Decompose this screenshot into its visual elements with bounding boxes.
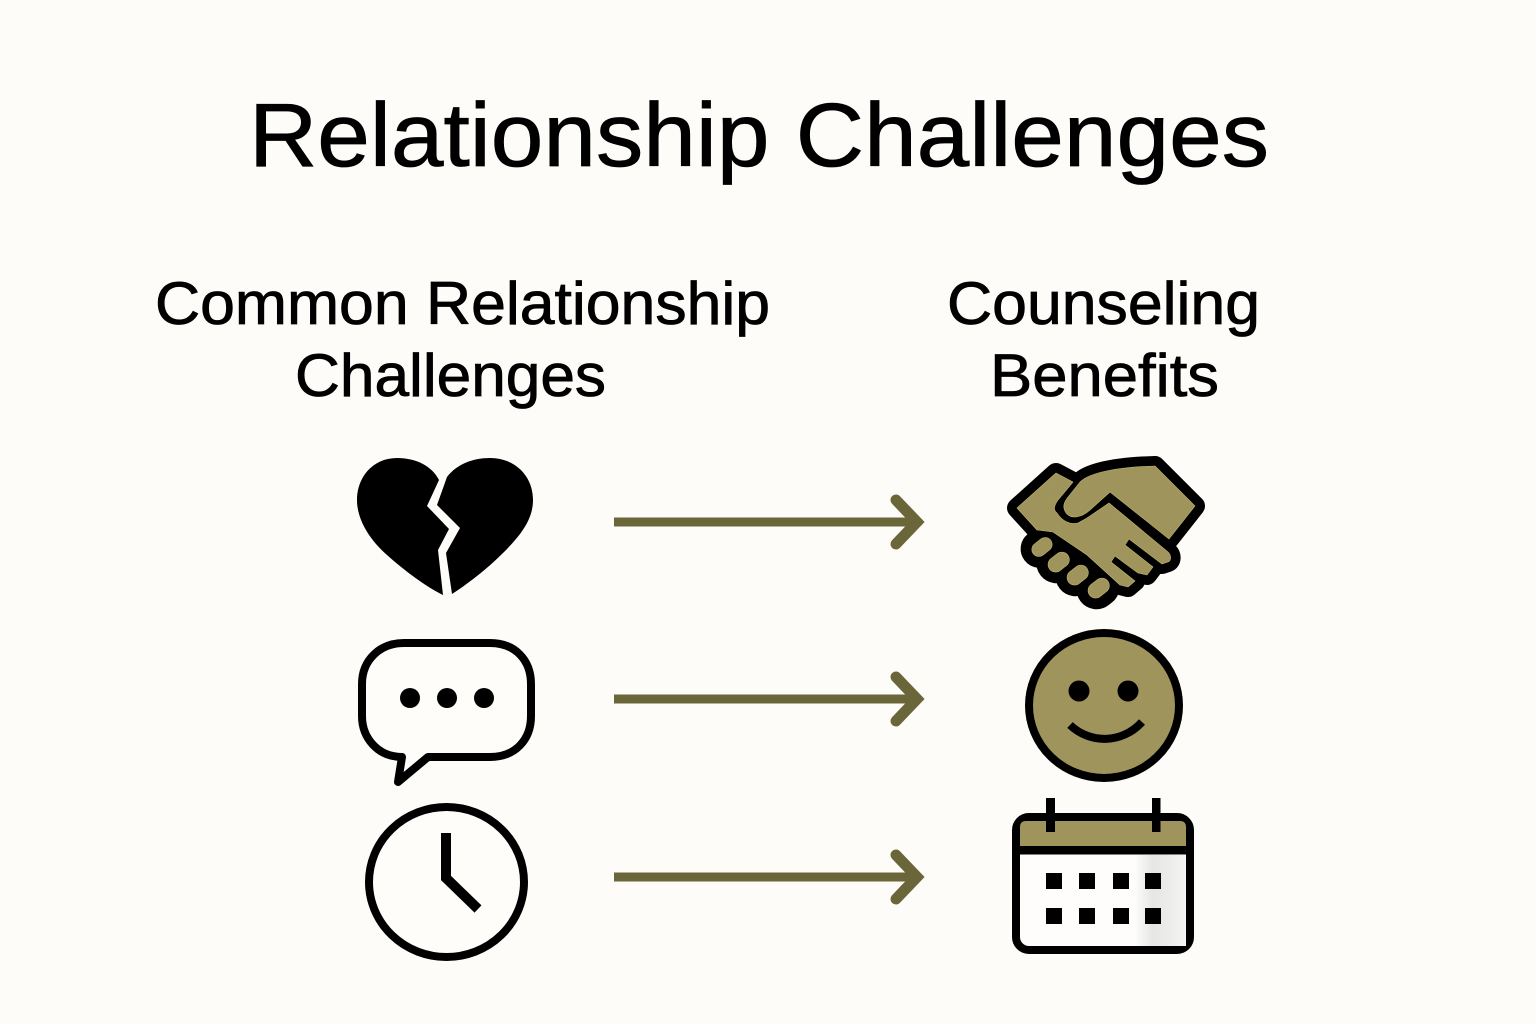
heading: common relationship challenges bbox=[155, 270, 770, 409]
arrow: heart to handshake bbox=[614, 500, 917, 544]
heading: common relationship challenges: Challenges bbox=[295, 342, 606, 409]
icon: handshake bbox=[1017, 466, 1195, 603]
heading: counseling benefits bbox=[947, 270, 1260, 409]
arrow: speech bubble to smiley bbox=[614, 677, 917, 721]
icon: speech bubble bbox=[362, 643, 531, 782]
icon: smiley face bbox=[1029, 633, 1179, 778]
title: Relationship Challenges bbox=[249, 86, 1269, 186]
heading: counseling benefits: Counseling bbox=[947, 270, 1260, 337]
icon: clock bbox=[369, 807, 524, 957]
heading: common relationship challenges: Common Relationship bbox=[155, 270, 770, 337]
arrow: clock to calendar bbox=[614, 855, 917, 899]
icon: broken heart bbox=[357, 458, 533, 595]
icon: calendar bbox=[1016, 798, 1190, 950]
heading: counseling benefits: Benefits bbox=[990, 342, 1219, 409]
